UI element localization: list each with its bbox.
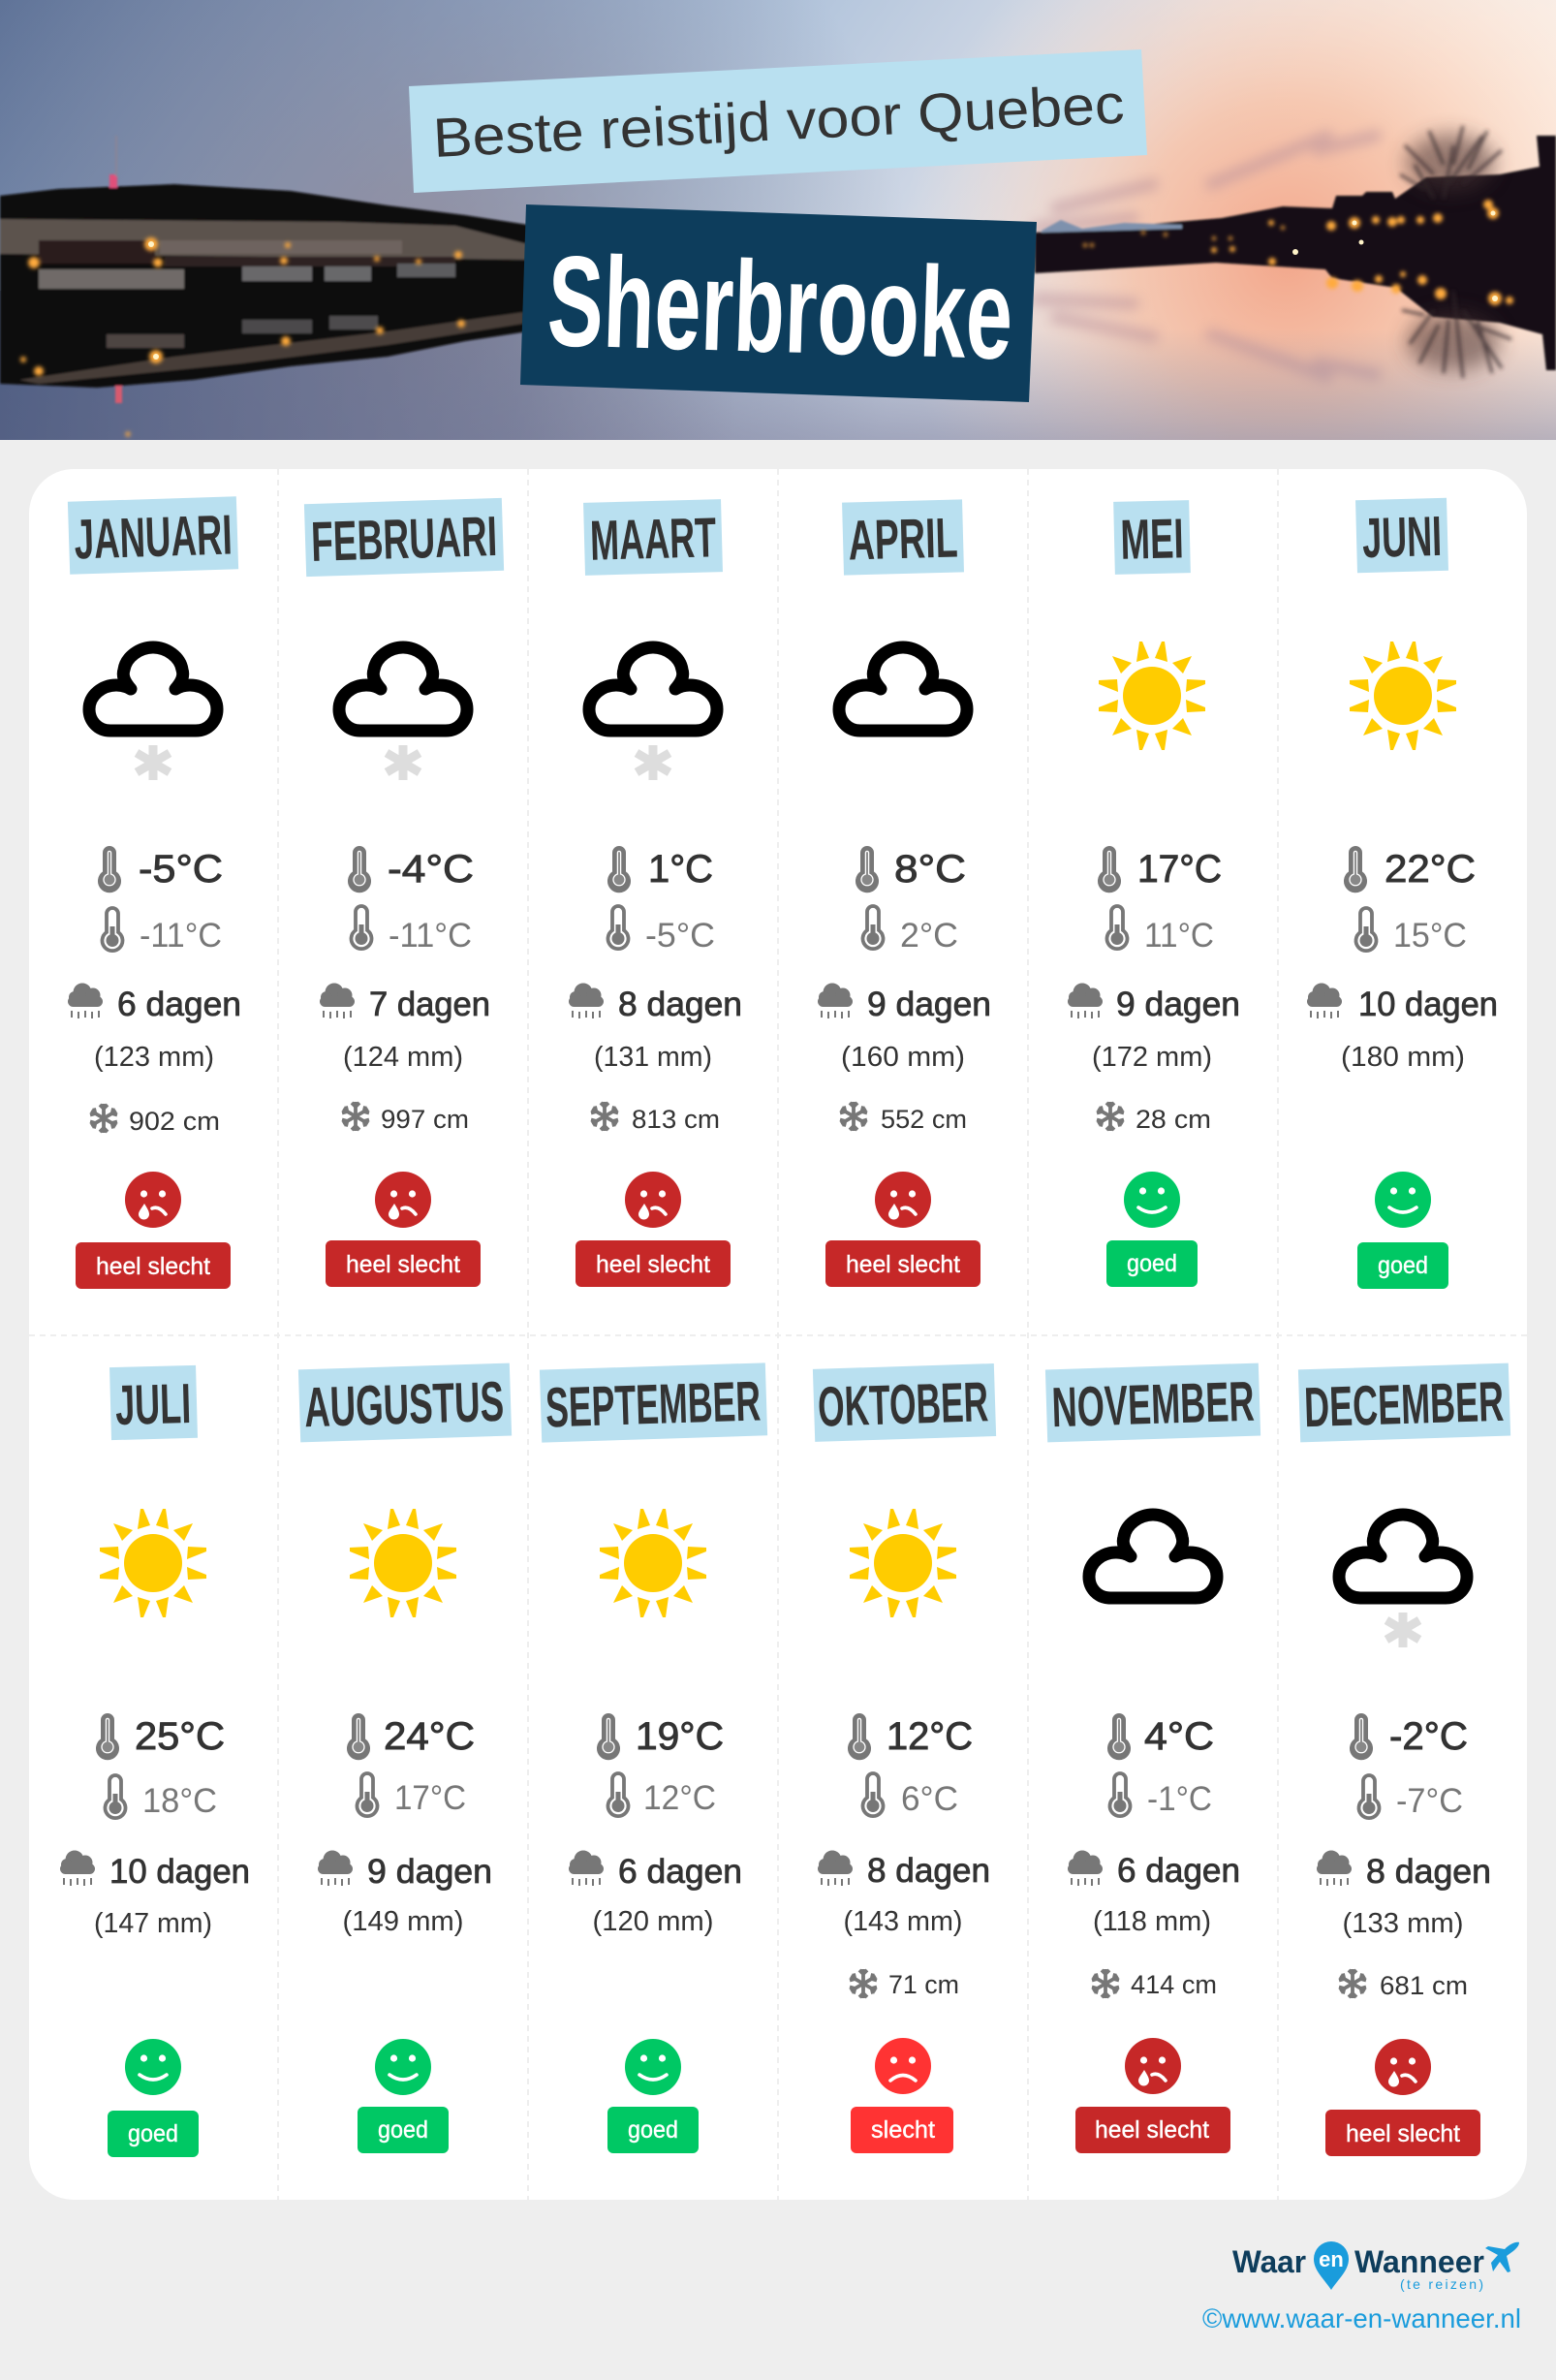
max temperature: -2°C [1389,1715,1468,1758]
rating badge [607,2107,699,2153]
max temperature [1351,1714,1468,1759]
max temperature [1099,847,1222,892]
max temperature [849,1714,973,1759]
rating badge [1106,1240,1198,1287]
logo: Waar en Wanneer: Wanneer [1354,2244,1484,2279]
snowfall: 902 cm [129,1107,220,1136]
max temperature: 24°C [384,1715,475,1758]
month label: MAART [589,506,717,573]
rain days [320,983,490,1023]
rain days: 9 dagen [367,1853,492,1891]
rain days [1317,1851,1491,1891]
rating badge [1075,2107,1230,2153]
min temperature: -11°C [140,917,222,955]
snowfall [90,1104,220,1136]
rating badge [851,2107,953,2153]
month label: FEBRUARI [310,505,498,574]
rain days: 6 dagen [117,986,241,1023]
month: december [1298,1363,1510,2156]
rainfall: (149 mm) [343,1906,463,1937]
rainfall: (180 mm) [1341,1042,1465,1073]
rain days [1068,983,1240,1023]
month: juni [1307,498,1498,1289]
month: oktober [813,1363,996,2153]
icon: cloud with snow [589,647,717,780]
snowfall [591,1102,720,1134]
icon: sun [1350,642,1456,750]
month: september [540,1362,767,2153]
icon: sun [850,1509,956,1617]
month label: JANUARI [74,503,233,572]
icon: sun [350,1509,456,1617]
banner: subtitle: Beste reistijd voor Quebec [431,74,1126,170]
min temperature [608,1773,716,1817]
icon: map pin: en [1319,2247,1344,2271]
icon: sun [600,1509,706,1617]
hero photo: Sherbrooke river at sunset [0,0,1556,440]
rating badge [76,1242,231,1289]
rainfall: (147 mm) [94,1908,212,1939]
rating badge [358,2107,449,2153]
max temperature: 4°C [1144,1715,1214,1758]
rating face [875,2038,931,2094]
month: mei [1068,500,1240,1287]
max temperature: 17°C [1137,848,1222,891]
rain days [1068,1851,1240,1890]
rating face [1124,1172,1180,1228]
rating face [625,1172,681,1228]
rating badge: heel slecht [846,1251,960,1278]
max temperature: 8°C [894,848,966,891]
rain days: 6 dagen [1117,1852,1240,1890]
rating face [1375,1172,1431,1228]
min temperature: -5°C [645,917,715,955]
min temperature: -7°C [1396,1782,1463,1820]
rain days [68,983,241,1023]
snowfall: 414 cm [1131,1970,1217,1999]
rain days: 10 dagen [1358,986,1498,1023]
max temperature [1345,847,1476,892]
tree and its reflection [1400,126,1511,378]
max temperature: 19°C [636,1715,724,1758]
month label: MEI [1120,507,1184,572]
month label: JUNI [1361,505,1443,570]
banner: city title [520,204,1037,402]
logo: Waar en Wanneer: Waar [1232,2244,1306,2279]
max temperature [97,1714,225,1759]
max temperature [608,847,713,892]
max temperature: 22°C [1385,848,1476,891]
rating face [875,1172,931,1228]
rain days [569,983,742,1023]
month: juli [60,1365,250,2157]
min temperature [1356,908,1467,955]
rating badge: heel slecht [96,1253,210,1280]
min temperature [1358,1775,1463,1820]
min temperature: 12°C [643,1779,716,1817]
icon: sun [1099,642,1205,750]
rating face [1125,2038,1181,2094]
min temperature [1110,1773,1212,1818]
max temperature [856,847,966,892]
snowfall: 681 cm [1380,1971,1468,2000]
max temperature: 25°C [135,1715,225,1758]
month label: JULI [114,1372,192,1437]
month label [813,1363,996,1442]
icon: cloud with snow [1339,1515,1467,1647]
month label: APRIL [848,507,958,572]
month: februari [304,498,504,1287]
month label: NOVEMBER [1051,1370,1256,1439]
max temperature: 12°C [887,1715,973,1758]
rain days: 9 dagen [867,986,991,1023]
month label: AUGUSTUS [303,1370,505,1439]
rating face [125,1172,181,1228]
banner: city title: Sherbrooke [545,230,1014,387]
rating badge: goed [378,2116,428,2144]
max temperature [348,1714,475,1759]
snowfall: 813 cm [632,1105,720,1134]
min temperature [351,906,472,955]
snowfall: 997 cm [381,1105,469,1134]
rainfall: (124 mm) [343,1042,463,1073]
rainfall: (160 mm) [841,1042,965,1073]
max temperature [99,847,223,892]
snowfall [1097,1102,1211,1134]
min temperature [862,1773,958,1818]
rainfall: (172 mm) [1092,1042,1212,1073]
max temperature: -4°C [388,848,474,891]
min temperature [862,906,958,955]
snowfall: 28 cm [1136,1105,1211,1134]
month: november [1045,1363,1260,2153]
month label [1045,1363,1260,1442]
rating face [375,1172,431,1228]
rating badge [108,2111,199,2157]
rating badge: goed [128,2120,178,2147]
rain days [818,983,991,1023]
rain days: 10 dagen [109,1853,250,1891]
min temperature [608,906,715,955]
rating badge: heel slecht [1346,2120,1460,2147]
icon: cloud [1089,1515,1217,1598]
icon: sun [100,1509,206,1617]
rating badge: goed [1127,1250,1177,1277]
source url: ©www.waar-en-wanneer.nl [1202,2303,1521,2333]
rating badge [326,1240,481,1287]
rain days [569,1851,742,1891]
rainfall: (120 mm) [593,1906,713,1937]
rainfall: (118 mm) [1093,1906,1211,1937]
rating badge [1325,2110,1480,2156]
icon: airplane [1485,2242,1519,2272]
min temperature: 11°C [1144,917,1214,955]
snowfall [840,1102,967,1134]
rating badge: heel slecht [1095,2116,1209,2144]
rating badge [576,1240,731,1287]
rating badge: heel slecht [596,1251,710,1278]
month label [109,1365,198,1440]
rating badge: heel slecht [346,1251,460,1278]
rain days: 8 dagen [618,986,742,1023]
month label [540,1362,767,1443]
month label [842,499,964,576]
month label [68,496,238,575]
min temperature: 15°C [1393,917,1467,955]
rating face [1375,2039,1431,2095]
rain days: 8 dagen [1366,1853,1491,1891]
snowfall: 552 cm [881,1105,967,1134]
max temperature [349,847,474,892]
min temperature [357,1773,466,1817]
snowfall [1339,1969,1468,2000]
rain days [60,1851,250,1891]
rain days [818,1851,990,1890]
min temperature [103,908,222,955]
icon: cloud with snow [339,647,467,780]
month label [304,498,504,577]
min temperature: 17°C [394,1779,466,1817]
max temperature [598,1714,724,1759]
max temperature: 1°C [648,848,713,891]
rainfall: (133 mm) [1343,1908,1463,1939]
min temperature: -11°C [389,917,472,955]
rating face [625,2039,681,2095]
snowfall [1092,1969,1217,1999]
max temperature: -5°C [139,848,223,891]
min temperature [1106,906,1214,955]
month: maart [569,499,742,1287]
rain days [318,1851,492,1891]
rainfall: (143 mm) [843,1906,963,1937]
rain days [1307,983,1498,1023]
rating badge: slecht [871,2116,935,2144]
rating badge [1357,1242,1448,1289]
month label [1113,500,1191,575]
logo: Waar en Wanneer: (te reizen) [1400,2276,1483,2292]
min temperature [105,1775,217,1820]
rating badge: goed [1378,1252,1428,1279]
logo: Waar en Wanneer [1232,2241,1519,2292]
rainfall: (123 mm) [94,1042,214,1073]
snowfall: 71 cm [888,1970,959,1999]
min temperature: -1°C [1147,1780,1212,1818]
min temperature: 18°C [142,1782,217,1820]
rating face [125,2039,181,2095]
rain days: 7 dagen [369,986,490,1023]
min temperature: 6°C [901,1780,958,1818]
month: april [818,499,991,1287]
rating face [375,2039,431,2095]
icon: map pin [1314,2241,1349,2290]
panel: climate calendar card [29,469,1527,2200]
icon: cloud [839,647,967,731]
rating badge [825,1240,980,1287]
rain days: 8 dagen [867,1852,990,1890]
banner: subtitle [409,49,1147,193]
rain days: 9 dagen [1116,986,1240,1023]
min temperature: 2°C [900,917,958,955]
icon: cloud with snow [89,647,217,780]
month label: SEPTEMBER [545,1370,762,1439]
snowfall [342,1102,469,1134]
month: augustus [298,1363,512,2153]
max temperature [1108,1714,1214,1759]
rain days: 6 dagen [618,1853,742,1891]
rainfall: (131 mm) [594,1042,712,1073]
month label [583,499,723,576]
month label [298,1363,512,1442]
month label [1355,498,1448,573]
month label: OKTOBER [817,1370,989,1439]
month: januari [68,496,241,1289]
rating badge: goed [628,2116,678,2144]
snowfall [850,1969,959,1999]
